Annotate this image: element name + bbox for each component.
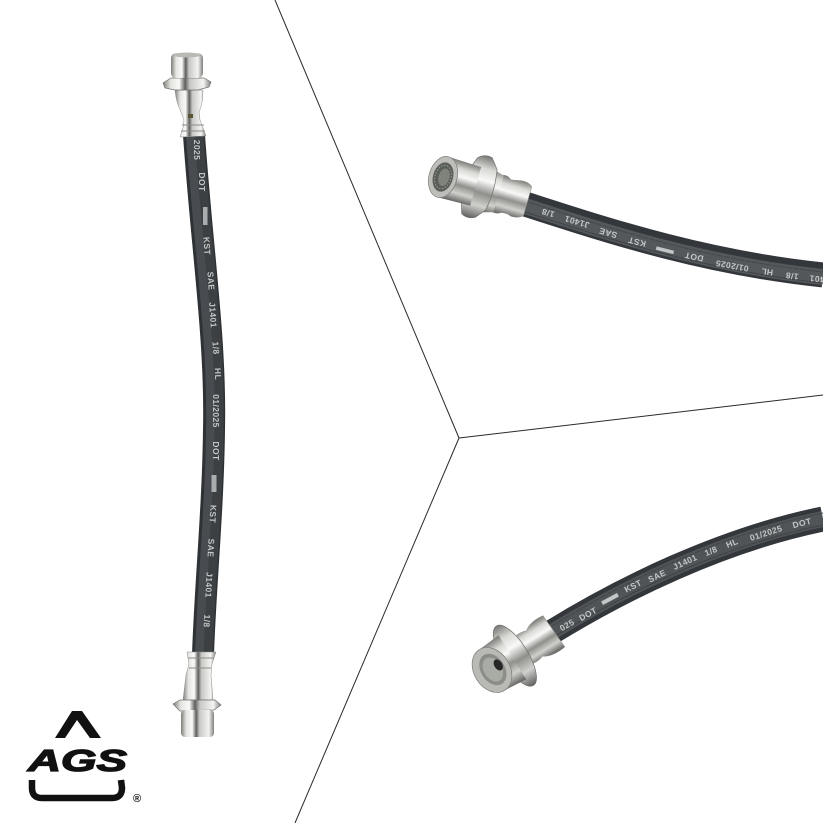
metal fitting	[421, 142, 537, 232]
hose markings: 01/2025	[749, 523, 783, 543]
hose markings: KST	[208, 505, 218, 524]
hose markings: 1/8	[703, 544, 719, 558]
hose markings: 1/8	[211, 341, 221, 355]
top fitting	[163, 52, 211, 137]
logo base	[32, 780, 122, 798]
registered mark: ®	[133, 793, 141, 805]
hose markings: 01/2025	[715, 258, 749, 274]
hose markings: DOT	[791, 516, 813, 530]
hose markings: KST	[623, 577, 644, 595]
hose markings: J1401	[671, 552, 699, 572]
hose markings: 2025	[192, 140, 202, 160]
hose body	[552, 513, 823, 638]
hose markings: DOT	[197, 172, 207, 192]
hose markings: J1401	[207, 302, 219, 328]
hose markings: DOT	[683, 250, 704, 264]
metal fitting	[458, 601, 573, 709]
logo wordmark: AGS	[27, 743, 127, 778]
hose markings: SAE	[205, 271, 217, 291]
hose body	[191, 135, 219, 655]
hose markings: KST	[627, 235, 647, 249]
hose markings: HL	[213, 368, 223, 380]
hose markings: DOT	[211, 441, 221, 461]
hose markings: 1/8	[202, 614, 212, 628]
hose markings: J1401	[203, 572, 215, 598]
panel: top-right close-up	[421, 142, 823, 285]
bottom fitting	[173, 652, 221, 737]
hose markings	[558, 516, 813, 633]
hose markings: HL	[724, 536, 740, 550]
hose markings	[192, 140, 223, 628]
hose markings: HL	[760, 266, 774, 278]
hose markings: 01/2025	[211, 394, 221, 428]
panel dividers	[275, 0, 823, 823]
hose markings: 1/8	[785, 270, 799, 282]
hose markings: 1/8	[540, 206, 556, 220]
hose markings: SAE	[206, 538, 216, 558]
hose markings: SAE	[598, 226, 618, 240]
hose markings: SAE	[646, 567, 668, 585]
hose body	[522, 200, 823, 283]
hose markings: 025	[558, 617, 576, 633]
hose markings: J1401	[563, 214, 591, 230]
AGS logo	[27, 711, 141, 805]
logo chevron	[55, 711, 101, 738]
hose markings	[540, 206, 823, 285]
panel: full brake hose, vertical	[163, 52, 223, 737]
hose markings: KST	[201, 237, 213, 256]
panel: bottom-right close-up	[458, 513, 823, 709]
hose markings: DOT	[577, 605, 599, 623]
